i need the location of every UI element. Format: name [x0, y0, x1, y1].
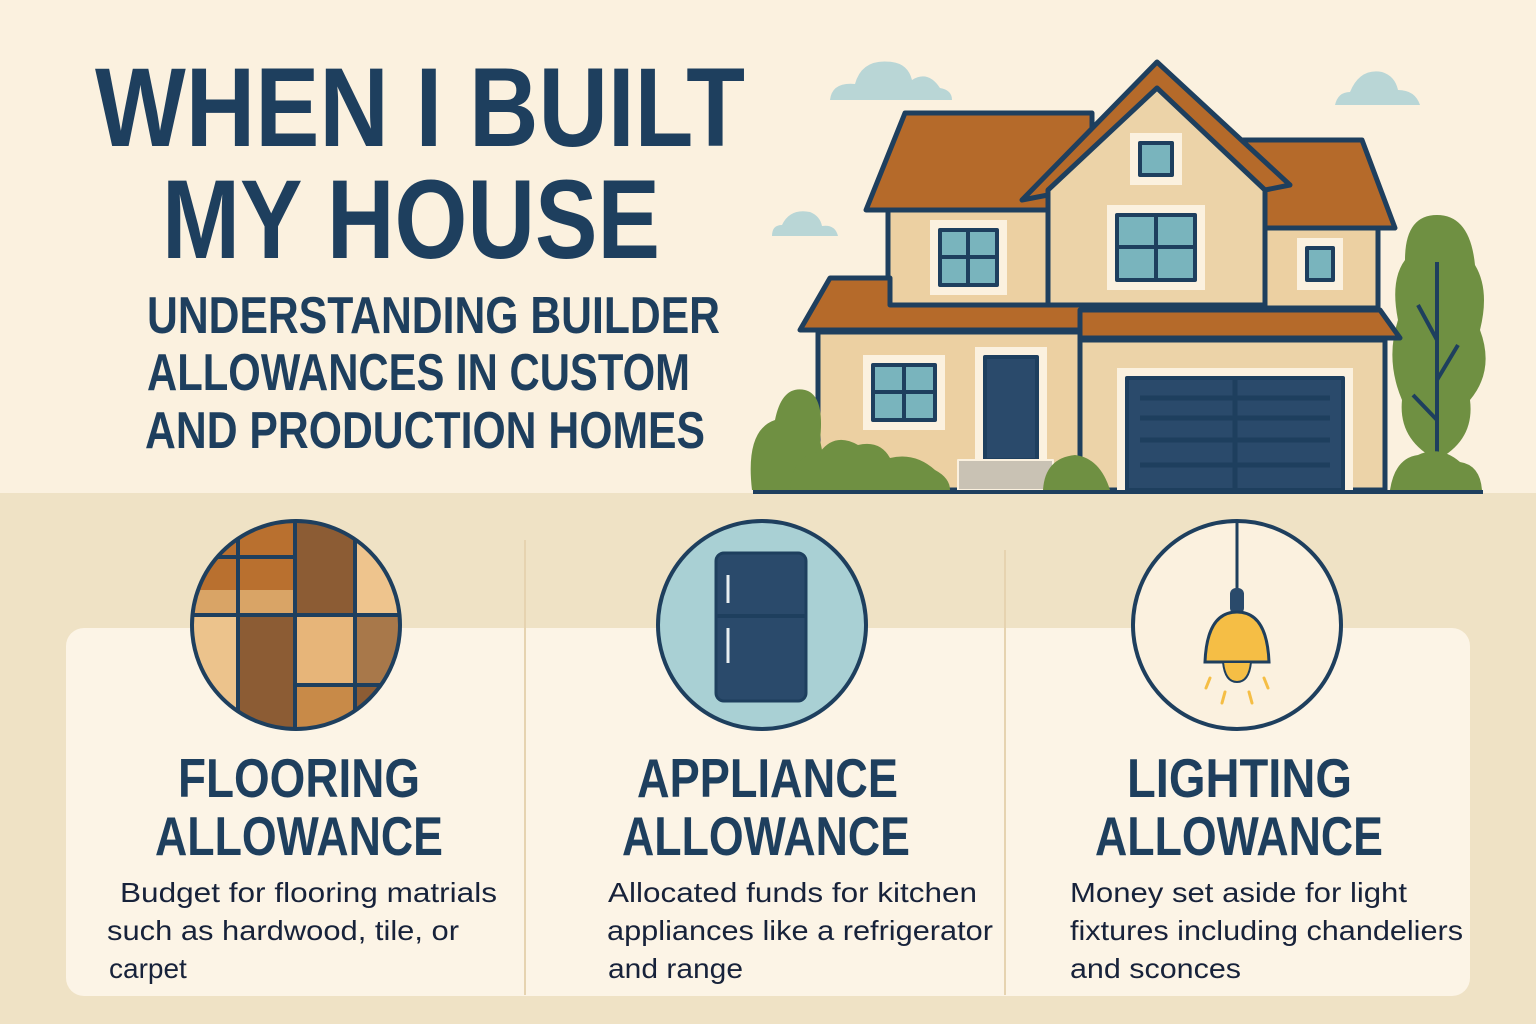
upper roofs [866, 113, 1092, 210]
text: flooring: carpet [109, 953, 187, 984]
text: appliance: Allocated funds for kitchen [608, 877, 977, 908]
text: appliance: appliances like a refrigerator [607, 915, 993, 946]
gable [1022, 62, 1290, 305]
subtitle: ALLOWANCES IN CUSTOM [147, 344, 690, 402]
tree [1392, 215, 1486, 490]
subtitle: UNDERSTANDING BUILDER [147, 287, 720, 345]
heading: lighting: LIGHTING [1127, 747, 1352, 809]
icon: flooring tiles [190, 520, 410, 735]
text: appliance [607, 877, 993, 984]
text: appliance: and range [608, 953, 743, 984]
upper walls [888, 210, 1050, 305]
windows [863, 133, 1353, 490]
icon: refrigerator [658, 521, 866, 729]
bushes [751, 389, 1482, 490]
subtitle [145, 287, 720, 460]
lower roofs [800, 278, 1082, 330]
title: WHEN I BUILT [95, 45, 745, 170]
garage door [1127, 378, 1343, 490]
panel: appliance [607, 521, 993, 984]
heading: flooring: FLOORING [178, 747, 420, 809]
heading: flooring: ALLOWANCE [155, 805, 443, 867]
heading: appliance: ALLOWANCE [622, 805, 910, 867]
text: lighting [1070, 877, 1463, 984]
door [985, 357, 1037, 460]
panel: flooring [107, 520, 497, 984]
subtitle: AND PRODUCTION HOMES [145, 402, 705, 460]
illustration: house [751, 61, 1486, 492]
panel: lighting [1070, 521, 1463, 984]
heading: lighting [1095, 747, 1383, 867]
heading: appliance: APPLIANCE [637, 747, 898, 809]
clouds [772, 61, 1420, 236]
title [95, 45, 745, 282]
text: lighting: fixtures including chandeliers [1070, 915, 1463, 946]
text: flooring: such as hardwood, tile, or [107, 915, 459, 946]
heading: lighting: ALLOWANCE [1095, 805, 1383, 867]
icon: pendant lamp [1133, 521, 1341, 729]
text: flooring: Budget for flooring matrials [120, 877, 497, 908]
text: lighting: and sconces [1070, 953, 1241, 984]
panel card [66, 628, 1470, 996]
text: lighting: Money set aside for light [1070, 877, 1407, 908]
heading: flooring [155, 747, 443, 867]
title: MY HOUSE [162, 157, 660, 282]
heading: appliance [622, 747, 910, 867]
text: flooring [107, 877, 497, 984]
lower walls [818, 332, 1080, 490]
